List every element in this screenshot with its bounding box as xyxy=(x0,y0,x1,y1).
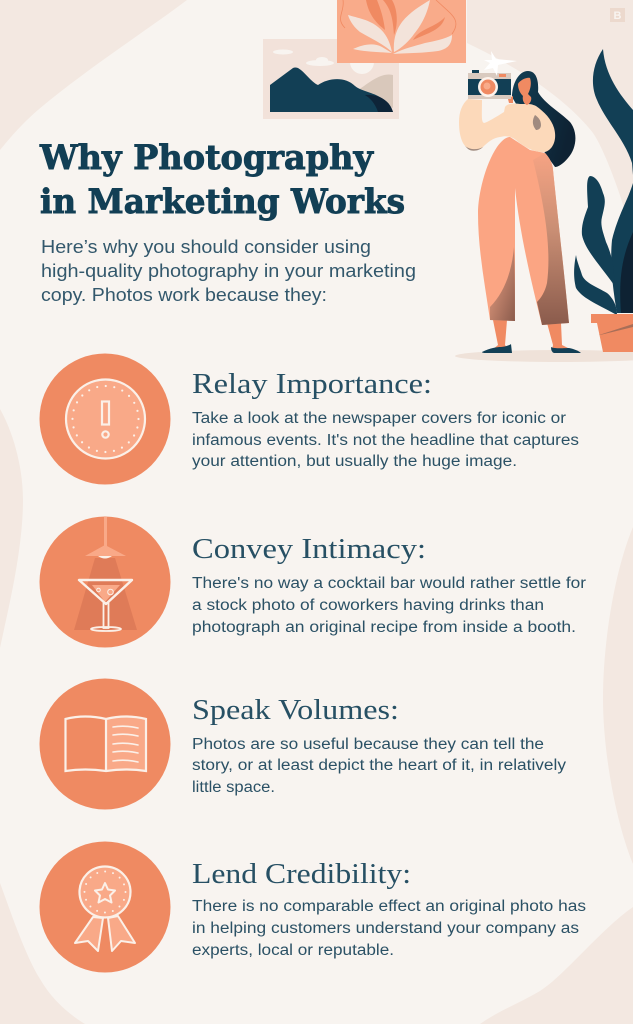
title: Why Photography xyxy=(39,138,374,178)
item: speak volumes xyxy=(40,678,566,810)
icon: award ribbon xyxy=(40,842,170,972)
body text: Take a look at the newspaper covers for iconic or xyxy=(192,410,566,427)
body text: Photos are so useful because they can tell the xyxy=(192,736,544,753)
item: lend credibility xyxy=(40,842,586,972)
title xyxy=(39,138,405,222)
photo: leaf artwork xyxy=(337,0,466,63)
heading: Lend Credibility: xyxy=(192,859,411,890)
body text: experts, local or reputable. xyxy=(192,942,394,959)
sweater shadow xyxy=(465,115,541,151)
camera xyxy=(468,70,511,99)
body text xyxy=(192,736,566,796)
intro text xyxy=(41,237,416,305)
body text: your attention, but usually the huge image. xyxy=(192,453,517,470)
icon: open book xyxy=(40,678,170,810)
camera flash xyxy=(484,51,517,76)
legs and shoes xyxy=(482,320,581,353)
body text: There is no comparable effect an original photo has xyxy=(192,898,586,915)
body text xyxy=(192,898,586,959)
sweater xyxy=(459,99,555,152)
body text xyxy=(192,410,579,470)
title: in Marketing Works xyxy=(40,182,405,222)
item: relay importance xyxy=(40,354,579,484)
body text: a stock photo of coworkers having drinks than xyxy=(192,597,544,614)
body text xyxy=(192,575,586,636)
ground shadow xyxy=(455,350,633,362)
trousers xyxy=(478,137,569,325)
photo: mountain landscape xyxy=(263,39,399,119)
body text: infamous events. It's not the headline that captures xyxy=(192,432,579,449)
icon: cocktail under lamp xyxy=(40,516,170,648)
logo badge: B xyxy=(614,10,622,22)
heading: Convey Intimacy: xyxy=(192,534,426,565)
heading: Relay Importance: xyxy=(192,369,432,400)
body text: little space. xyxy=(192,779,275,796)
illustration: woman with camera xyxy=(455,51,633,362)
body text: story, or at least depict the heart of it, in relatively xyxy=(192,757,566,774)
face and neck xyxy=(507,78,531,105)
plant pot xyxy=(591,314,633,352)
icon: exclamation badge xyxy=(40,354,170,484)
intro text: Here’s why you should consider using xyxy=(41,237,371,257)
body text: in helping customers understand your company as xyxy=(192,920,579,937)
item: convey intimacy xyxy=(40,516,586,648)
heading: Speak Volumes: xyxy=(192,695,399,726)
body text: photograph an original recipe from inside a booth. xyxy=(192,619,576,636)
illustration: potted plant xyxy=(574,49,633,352)
logo badge xyxy=(610,8,625,22)
intro text: copy. Photos work because they: xyxy=(41,285,327,305)
intro text: high-quality photography in your marketing xyxy=(41,261,416,281)
body text: There's no way a cocktail bar would rather settle for xyxy=(192,575,586,592)
hair xyxy=(512,71,575,167)
